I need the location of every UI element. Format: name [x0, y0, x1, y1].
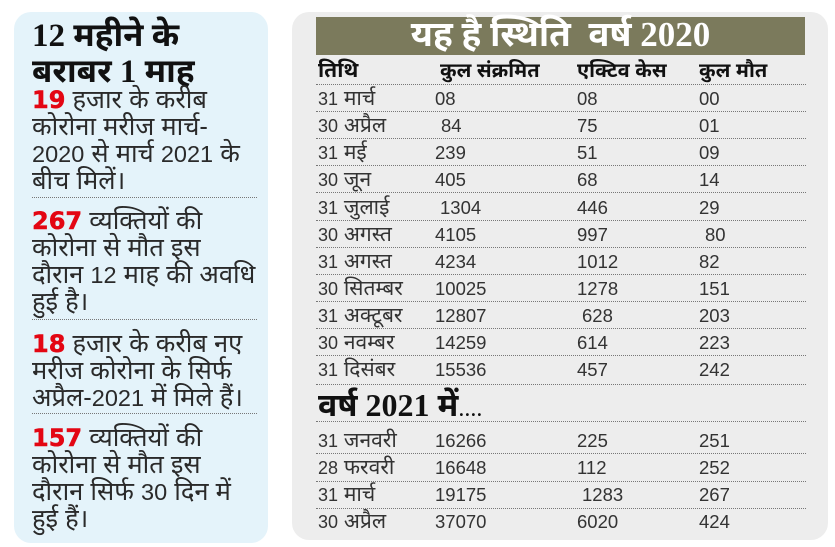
table title banner: यह है स्थिति वर्ष 2020 [411, 15, 710, 54]
table row 31 August: 31 अगस्त [318, 250, 392, 273]
table row 30 August: 30 अगस्त [318, 223, 392, 246]
table row 28 February: 16648 [435, 457, 486, 478]
table row 28 February: 28 फरवरी [318, 456, 394, 479]
table row 31 March 2021: 19175 [435, 484, 486, 505]
heading: 12 months equal 1 month [32, 16, 196, 90]
table row 31 May [318, 140, 720, 164]
table header row: कुल मौत [699, 60, 767, 82]
table row 31 March: 31 मार्च [318, 87, 375, 110]
text block: 157 deaths [32, 423, 232, 536]
text block: 18 thousand [32, 328, 243, 412]
table row 31 January: 251 [699, 430, 730, 451]
table row 31 August [318, 250, 720, 273]
table row 30 November: 14259 [435, 332, 486, 353]
table header row: कुल संक्रमित [440, 60, 540, 82]
table row 30 April: 30 अप्रैल [318, 114, 386, 137]
text block: 267 deaths: कोरोना से मौत इस [32, 234, 201, 262]
table row 31 March: 00 [699, 88, 720, 109]
table row 31 January [318, 428, 730, 452]
table row 30 June [318, 168, 720, 192]
table row 31 May: 31 मई [318, 141, 367, 164]
text block: 19 thousand: बीच मिलें। [32, 167, 125, 195]
table row 30 April: 75 [577, 115, 598, 136]
table row 31 May: 239 [435, 142, 466, 163]
table row 30 November: 30 नवम्बर [318, 331, 395, 354]
panel: right data table [292, 12, 828, 540]
text block: 18 thousand: अप्रैल-2021 में मिले हैं। [32, 384, 243, 412]
table row 30 August: 997 [577, 224, 608, 245]
table header row: एक्टिव केस [577, 60, 667, 82]
table row 31 October: 12807 [435, 305, 486, 326]
table row 30 August: 4105 [435, 224, 476, 245]
table row 30 September: 30 सितम्बर [318, 277, 403, 300]
table header row [318, 58, 768, 82]
table row 30 April 2021: 424 [699, 511, 730, 532]
text block: 157 deaths: 157 व्यक्तियों की [32, 424, 202, 452]
table row 31 October [318, 304, 730, 328]
table row 30 September: 151 [699, 278, 730, 299]
table row 30 April [318, 113, 720, 137]
table row 31 July: 446 [577, 197, 608, 218]
table title banner [316, 17, 805, 55]
table row 30 June: 14 [699, 169, 720, 190]
text block: 267 deaths: दौरान 12 माह की अवधि [32, 261, 255, 289]
subheading: year 2021: वर्ष 2021 में.... [318, 387, 482, 423]
table row 31 March: 08 [435, 88, 456, 109]
text block: 157 deaths: दौरान सिर्फ 30 दिन में [32, 478, 231, 506]
table row 31 December: 15536 [435, 359, 486, 380]
table row 31 May: 51 [577, 142, 598, 163]
text block: 19 thousand: 2020 से मार्च 2021 के [32, 140, 240, 168]
table row 31 December [318, 358, 730, 381]
table row 28 February [318, 456, 730, 479]
heading: 12 months equal 1 month: बराबर 1 माह [32, 54, 195, 90]
table row 31 March [318, 86, 720, 110]
table row 31 March 2021: 1283 [582, 484, 623, 505]
table row 30 April 2021 [318, 509, 730, 533]
table row 30 April 2021: 6020 [577, 511, 618, 532]
text block: 19 thousand: 19 हजार के करीब [32, 86, 207, 114]
table row 31 July [318, 195, 720, 220]
table row 31 January: 31 जनवरी [318, 429, 397, 452]
table row 31 March 2021: 267 [699, 484, 730, 505]
text block: 267 deaths: हुई है। [32, 288, 88, 316]
table row 31 October: 628 [582, 305, 613, 326]
table row 31 July: 29 [699, 197, 720, 218]
text block: 18 thousand: मरीज कोरोना के सिर्फ [32, 357, 232, 385]
table row 30 November: 223 [699, 332, 730, 353]
text block: 157 deaths: हुई हैं। [32, 505, 88, 533]
table row 31 March: 08 [577, 88, 598, 109]
text block: 19 thousand [32, 84, 240, 195]
table row 31 October: 31 अक्टूबर [318, 304, 403, 327]
text block: 157 deaths: कोरोना से मौत इस [32, 451, 201, 479]
table row 28 February: 252 [699, 457, 730, 478]
text block: 267 deaths [32, 206, 256, 318]
table row 30 June: 405 [435, 169, 466, 190]
table row 31 July: 1304 [440, 197, 481, 218]
table row 31 January: 16266 [435, 430, 486, 451]
table row 30 August [318, 223, 726, 246]
table row 30 June: 68 [577, 169, 598, 190]
table row 31 August: 82 [699, 251, 720, 272]
table row 30 September: 10025 [435, 278, 486, 299]
table row 31 July: 31 जुलाई [318, 196, 389, 219]
table row 31 May: 09 [699, 142, 720, 163]
table row 30 September: 1278 [577, 278, 618, 299]
table row 31 January: 225 [577, 430, 608, 451]
table row 31 December: 31 दिसंबर [318, 358, 395, 381]
table row 30 August: 80 [705, 224, 726, 245]
table row 31 August: 4234 [435, 251, 476, 272]
table row 30 April 2021: 37070 [435, 511, 486, 532]
table row 31 March 2021: 31 मार्च [318, 483, 375, 506]
table row 30 November [318, 331, 730, 354]
panel: left summary [14, 12, 268, 543]
text block: 267 deaths: 267 व्यक्तियों की [32, 207, 202, 235]
table row 31 October: 203 [699, 305, 730, 326]
table row 31 December: 457 [577, 359, 608, 380]
table row 28 February: 112 [577, 457, 606, 478]
table row 30 November: 614 [577, 332, 608, 353]
table header row: तिथि [318, 59, 358, 82]
table row 31 March 2021 [318, 482, 730, 506]
table row 30 April: 01 [699, 115, 720, 136]
table row 31 December: 242 [699, 359, 730, 380]
table row 30 April: 84 [441, 115, 462, 136]
heading: 12 months equal 1 month: 12 महीने के [32, 18, 179, 54]
table row 30 June: 30 जून [318, 168, 371, 191]
table row 30 September [318, 276, 730, 300]
table row 30 April 2021: 30 अप्रैल [318, 510, 386, 533]
table row 31 August: 1012 [577, 251, 618, 272]
text block: 19 thousand: कोरोना मरीज मार्च- [32, 113, 208, 141]
text block: 18 thousand: 18 हजार के करीब नए [32, 330, 242, 358]
